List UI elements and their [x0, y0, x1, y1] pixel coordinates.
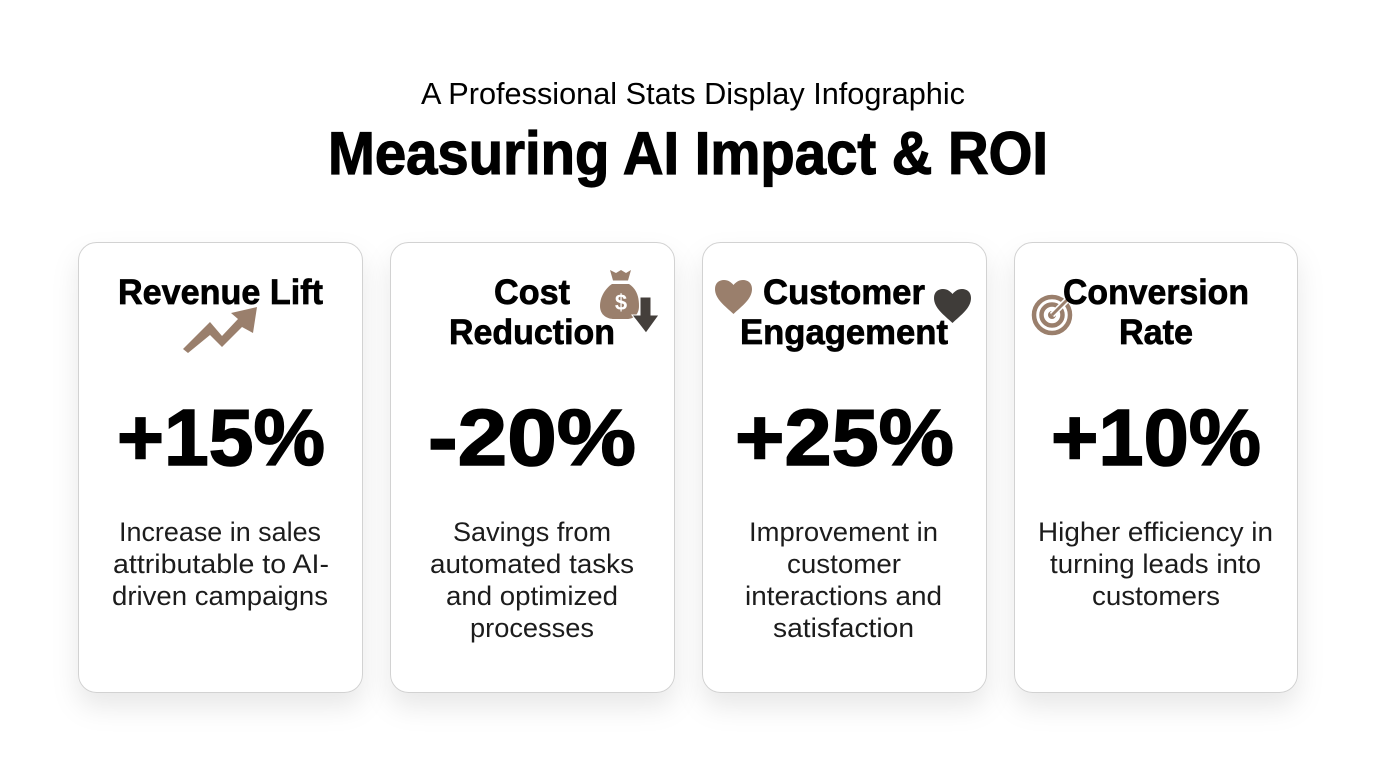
description: processes [470, 613, 594, 643]
heading [740, 273, 948, 352]
description [1038, 517, 1273, 611]
heading: Reduction [449, 313, 615, 352]
description: driven campaigns [112, 581, 328, 611]
description: Improvement in [749, 517, 938, 547]
stat: -20% [428, 393, 636, 482]
panel: conversion rate [1014, 242, 1298, 692]
description: attributable to AI- [113, 549, 329, 579]
icon: light heart [715, 280, 752, 314]
stat: +15% [117, 393, 325, 482]
heading: Conversion [1063, 273, 1249, 312]
card background [702, 242, 986, 692]
heading: Customer [763, 273, 925, 312]
heading [449, 273, 615, 352]
description: interactions and [745, 581, 942, 611]
header [328, 76, 1048, 187]
heading: Rate [1119, 313, 1193, 352]
description: automated tasks [430, 549, 634, 579]
description [745, 517, 942, 643]
icon: dark heart [934, 289, 971, 323]
stat: +25% [735, 393, 954, 482]
stat: +10% [1051, 393, 1261, 482]
icon: target [1034, 297, 1070, 333]
description: customer [787, 549, 901, 579]
heading: Revenue Lift [118, 273, 323, 312]
subtitle: A Professional Stats Display Infographic [421, 76, 965, 111]
description: and optimized [446, 581, 618, 611]
description: Increase in sales [119, 517, 321, 547]
description: Savings from [453, 517, 611, 547]
description: satisfaction [773, 613, 914, 643]
icon: money bag with down arrow [600, 270, 659, 333]
description: Higher efficiency in [1038, 517, 1273, 547]
description: turning leads into [1050, 549, 1261, 579]
heading [1063, 273, 1249, 352]
heading: Cost [494, 273, 570, 312]
heading: Engagement [740, 313, 948, 352]
description [430, 517, 634, 643]
description: customers [1092, 581, 1220, 611]
panel: revenue lift [78, 242, 362, 692]
description [112, 517, 329, 611]
icon: rising arrow [183, 307, 257, 353]
card background [390, 242, 674, 692]
card background [1014, 242, 1298, 692]
panel: cost reduction [390, 242, 674, 692]
icon: money bag with down arrow: $ [615, 290, 627, 315]
title: Measuring AI Impact & ROI [328, 120, 1048, 187]
panel: customer engagement [702, 242, 986, 692]
card background [78, 242, 362, 692]
